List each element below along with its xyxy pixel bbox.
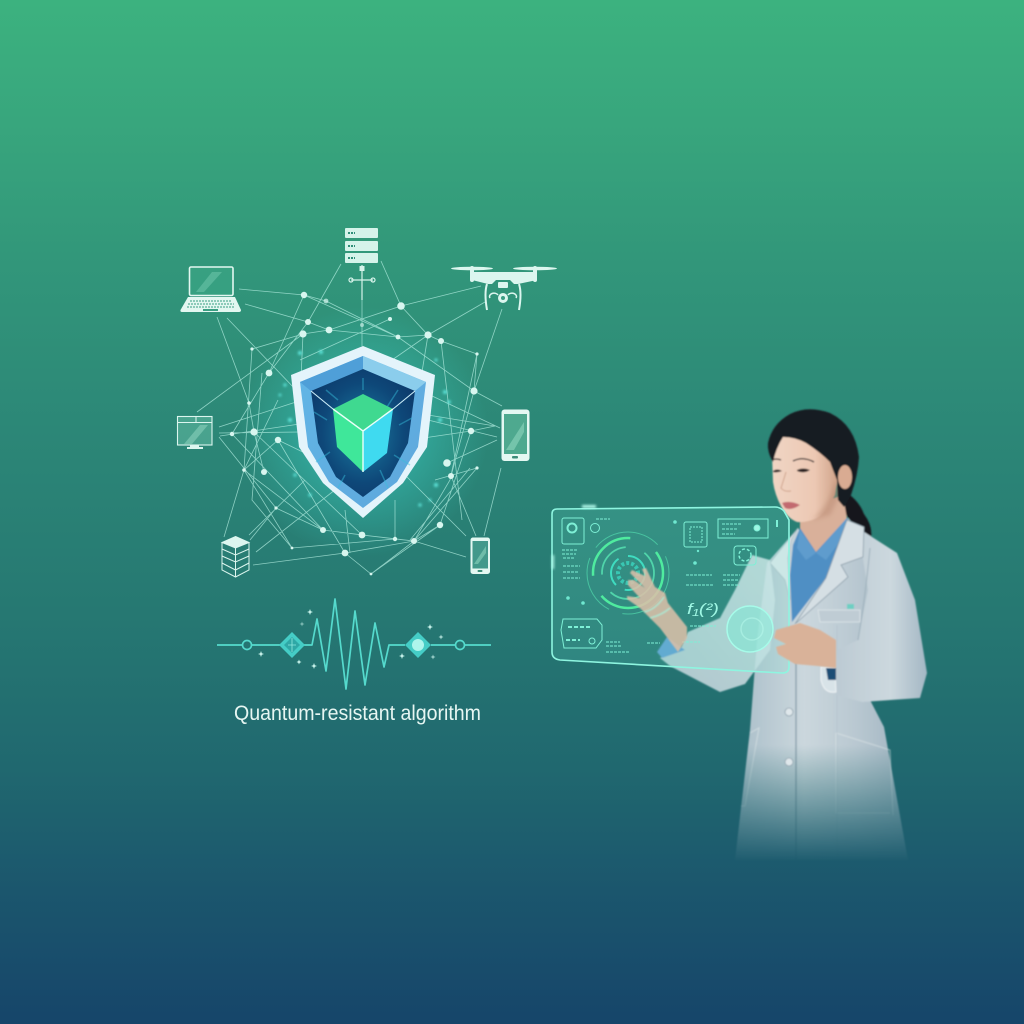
icon: small smartphone — [470, 538, 490, 574]
icon: server stack — [345, 228, 378, 300]
shield dark core — [311, 369, 415, 497]
glowing particles around shield — [279, 350, 451, 507]
lab coat — [735, 518, 908, 860]
blue shirt — [790, 518, 852, 622]
network diagram — [178, 228, 557, 577]
icon: laptop — [180, 267, 241, 312]
panel data widgets — [561, 518, 777, 652]
caption: algorithm label: Quantum-resistant algorithm — [234, 702, 481, 725]
brows, eyes and lips — [772, 459, 814, 509]
right arm sleeve — [836, 528, 927, 702]
icon: monitor — [178, 416, 212, 449]
panel glass — [552, 507, 789, 673]
cube — [311, 391, 415, 472]
chest pocket — [818, 610, 860, 622]
coat lapels — [795, 520, 864, 624]
ear — [838, 465, 852, 489]
light rays — [314, 378, 412, 488]
shield outer rim — [291, 346, 435, 518]
icon: drone — [451, 266, 557, 310]
waveform line — [217, 599, 491, 689]
ring nodes — [242, 640, 464, 650]
icon: large smartphone — [502, 410, 530, 461]
left diamond node — [279, 632, 305, 658]
inner ring of hologram button — [741, 618, 763, 640]
raised left hand — [627, 568, 687, 652]
lower coat pockets and seams — [741, 728, 893, 815]
holographic panel — [552, 505, 789, 673]
neck — [800, 495, 848, 560]
icon: database stack — [222, 536, 249, 577]
network connection lines — [197, 261, 502, 574]
coat buttons — [785, 708, 793, 766]
hair — [768, 409, 859, 507]
circular hologram button — [727, 606, 773, 652]
ponytail — [842, 495, 871, 538]
network nodes — [230, 292, 479, 575]
panel formula: f₁(²) — [687, 601, 719, 618]
radial dial — [587, 532, 669, 614]
panel dots — [566, 520, 699, 605]
central glow — [238, 307, 488, 557]
left arm sleeve — [660, 555, 775, 692]
icon: security shield with cube — [291, 346, 435, 518]
scientist figure — [657, 409, 927, 860]
right diamond node — [405, 632, 431, 658]
shield blue band — [300, 356, 426, 508]
algorithm waveform — [217, 599, 491, 689]
right cuff — [821, 667, 836, 692]
left cuff — [657, 637, 685, 658]
holding right hand — [774, 623, 836, 668]
panel glow highlights — [552, 505, 596, 569]
face — [772, 433, 838, 522]
sparkles — [258, 609, 444, 669]
coat body — [735, 518, 908, 860]
cheek and jaw shadow — [812, 480, 840, 520]
